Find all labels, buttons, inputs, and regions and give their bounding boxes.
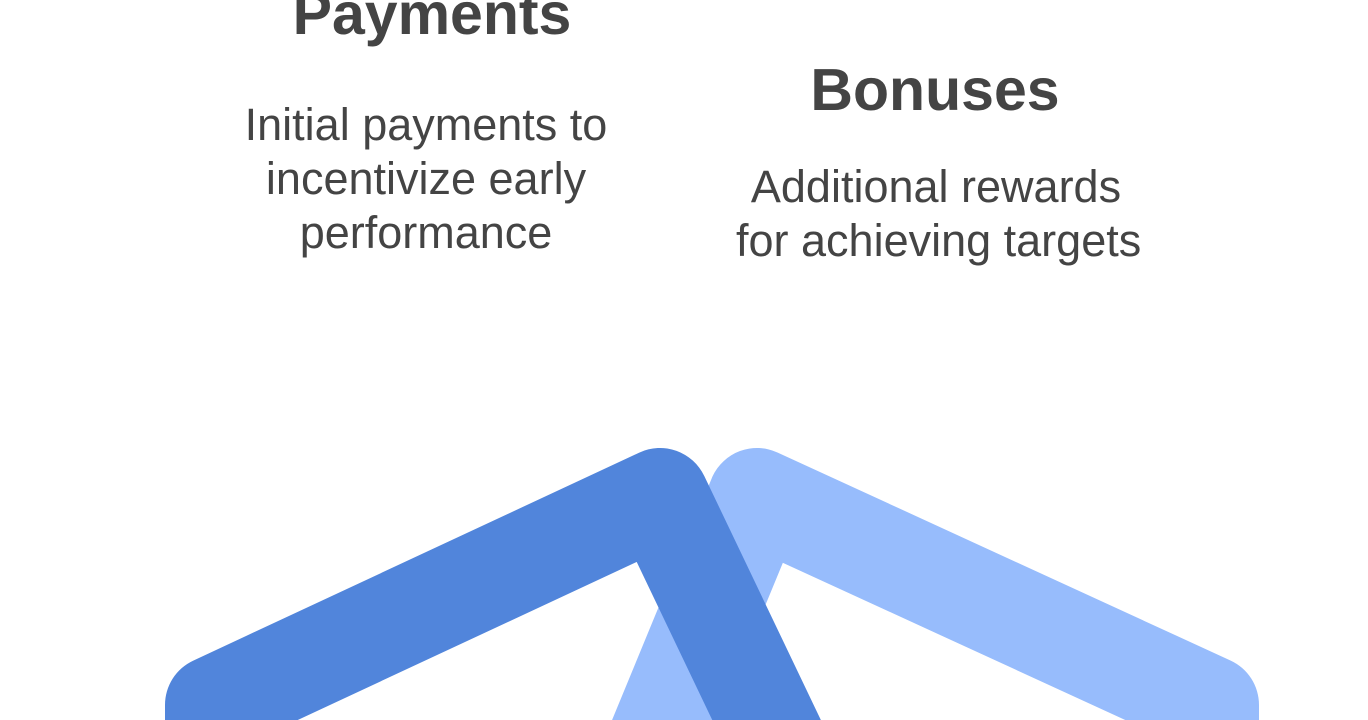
text: payments description: performance [300,207,552,258]
text: bonuses description: Additional rewards [751,161,1121,212]
text: payments description: Initial payments to [245,99,607,150]
arch: dark blue [214,497,800,720]
text: payments description: incentivize early [266,153,586,204]
text: bonuses description [736,161,1141,266]
heading: Bonuses: Bonuses [810,57,1060,123]
text: bonuses description: for achieving targets [736,215,1141,266]
arch: light blue [656,497,1210,720]
text: payments description [245,99,607,258]
